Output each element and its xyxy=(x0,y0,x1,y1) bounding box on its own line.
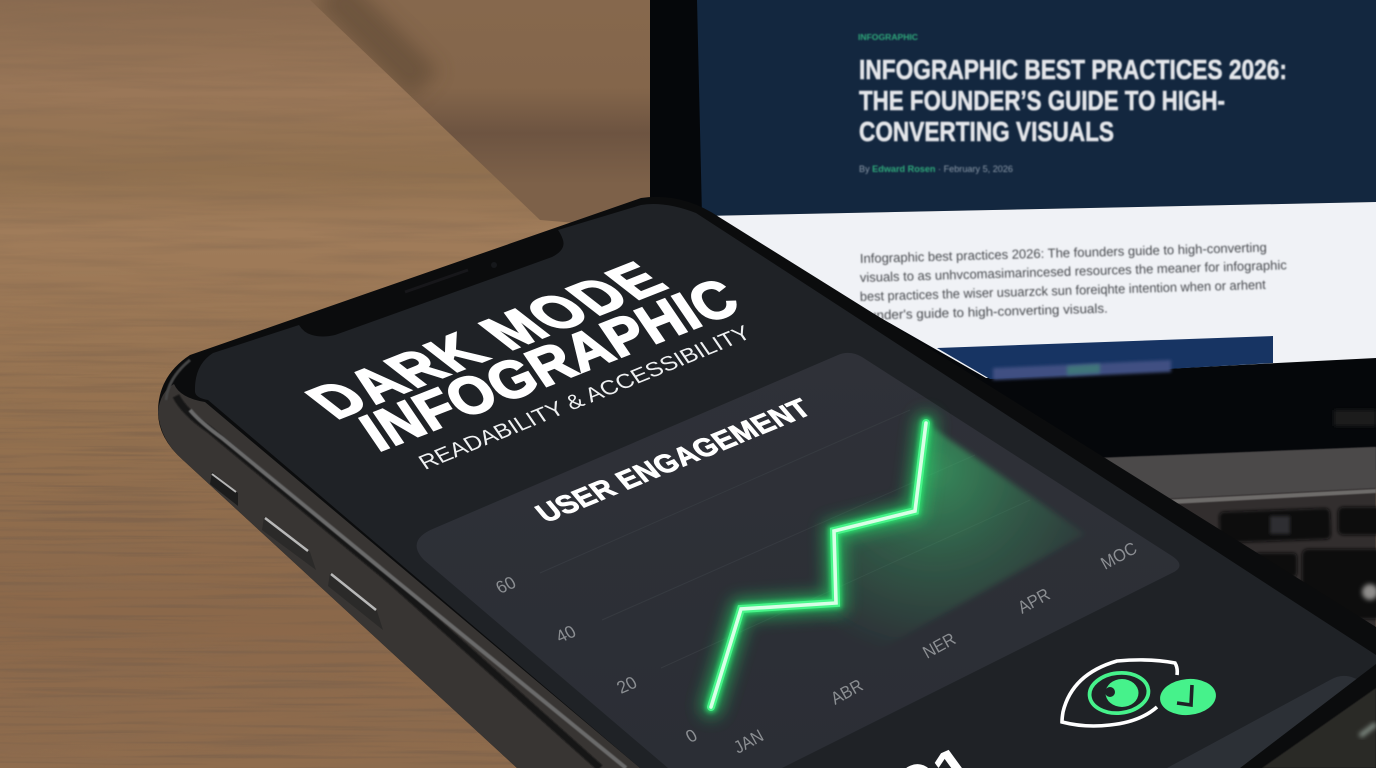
chart heading: USER ENGAGEMENT xyxy=(529,393,818,528)
y axis labels xyxy=(492,572,701,747)
article byline: By Edward Rosen · February 5, 2026 xyxy=(859,164,1013,175)
eye outline xyxy=(1062,660,1177,726)
keyboard keys xyxy=(1219,507,1376,619)
article headline: INFOGRAPHIC BEST PRACTICES 2026: xyxy=(859,54,1287,85)
subtitle: READABILITY & ACCESSIBILITY xyxy=(414,321,755,474)
x axis labels: APR xyxy=(1014,584,1053,618)
x axis labels: ABR xyxy=(827,675,866,709)
article paragraph xyxy=(858,240,1287,323)
article paragraph: founder's guide to high-converting visuals. xyxy=(858,301,1108,323)
phone body xyxy=(158,197,1376,768)
neon line chart xyxy=(711,423,926,707)
laptop deck xyxy=(1100,447,1376,768)
phone screen xyxy=(195,204,1376,768)
bottom right card xyxy=(1167,676,1369,768)
notch speaker and camera xyxy=(405,262,497,292)
laptop bezel xyxy=(650,0,1376,470)
article headline: THE FOUNDER’S GUIDE TO HIGH- xyxy=(859,85,1225,116)
side button: mute xyxy=(210,472,238,506)
laptop hinge label xyxy=(1334,410,1376,426)
y axis labels: 0 xyxy=(682,725,701,747)
y axis labels: 20 xyxy=(613,672,641,698)
chart card xyxy=(417,353,1179,768)
hero image strip xyxy=(993,360,1171,380)
phone side metal band xyxy=(158,384,640,768)
side button: volume down xyxy=(328,573,383,630)
x axis labels: JAN xyxy=(730,726,767,758)
pupil xyxy=(1106,679,1138,707)
article tag: INFOGRAPHIC xyxy=(858,33,918,42)
title: INFOGRAPHIC xyxy=(349,267,750,462)
wooden desk background xyxy=(0,70,570,768)
phone bottom right corner metal xyxy=(1262,688,1376,768)
laptop screen white body xyxy=(702,202,1376,378)
blurred back desk surface xyxy=(310,0,660,230)
x axis labels: NER xyxy=(919,629,959,663)
laptop in background xyxy=(650,0,1376,768)
article paragraph: best practices the wiser usuarzck sun foreiqhte intention when or arhent xyxy=(860,277,1266,304)
x axis labels: MOC xyxy=(1097,538,1140,574)
chart gridlines xyxy=(540,410,1030,668)
y axis labels: 60 xyxy=(492,572,520,598)
check badge xyxy=(1160,678,1216,716)
title: DARK MODE xyxy=(293,253,683,428)
check mark xyxy=(1177,685,1192,705)
article hero image block xyxy=(937,336,1273,379)
side button: volume up xyxy=(262,517,316,570)
x axis labels xyxy=(730,538,1140,758)
laptop screen navy header xyxy=(697,0,1376,216)
article paragraph: Infographic best practices 2026: The founders guide to high-converting xyxy=(860,240,1267,266)
article paragraph: visuals to as unhvcomasimarincesed resources the meaner for infographic xyxy=(860,257,1287,285)
phone chrome highlight xyxy=(176,396,600,768)
phone xyxy=(158,197,1376,768)
y axis labels: 40 xyxy=(552,621,580,647)
chart area fill xyxy=(840,426,1080,634)
iris ring xyxy=(1088,670,1150,716)
icon: eye with check badge xyxy=(1062,660,1217,726)
article headline: CONVERTING VISUALS xyxy=(859,116,1114,147)
article headline xyxy=(859,54,1287,147)
screen content xyxy=(293,253,1369,768)
